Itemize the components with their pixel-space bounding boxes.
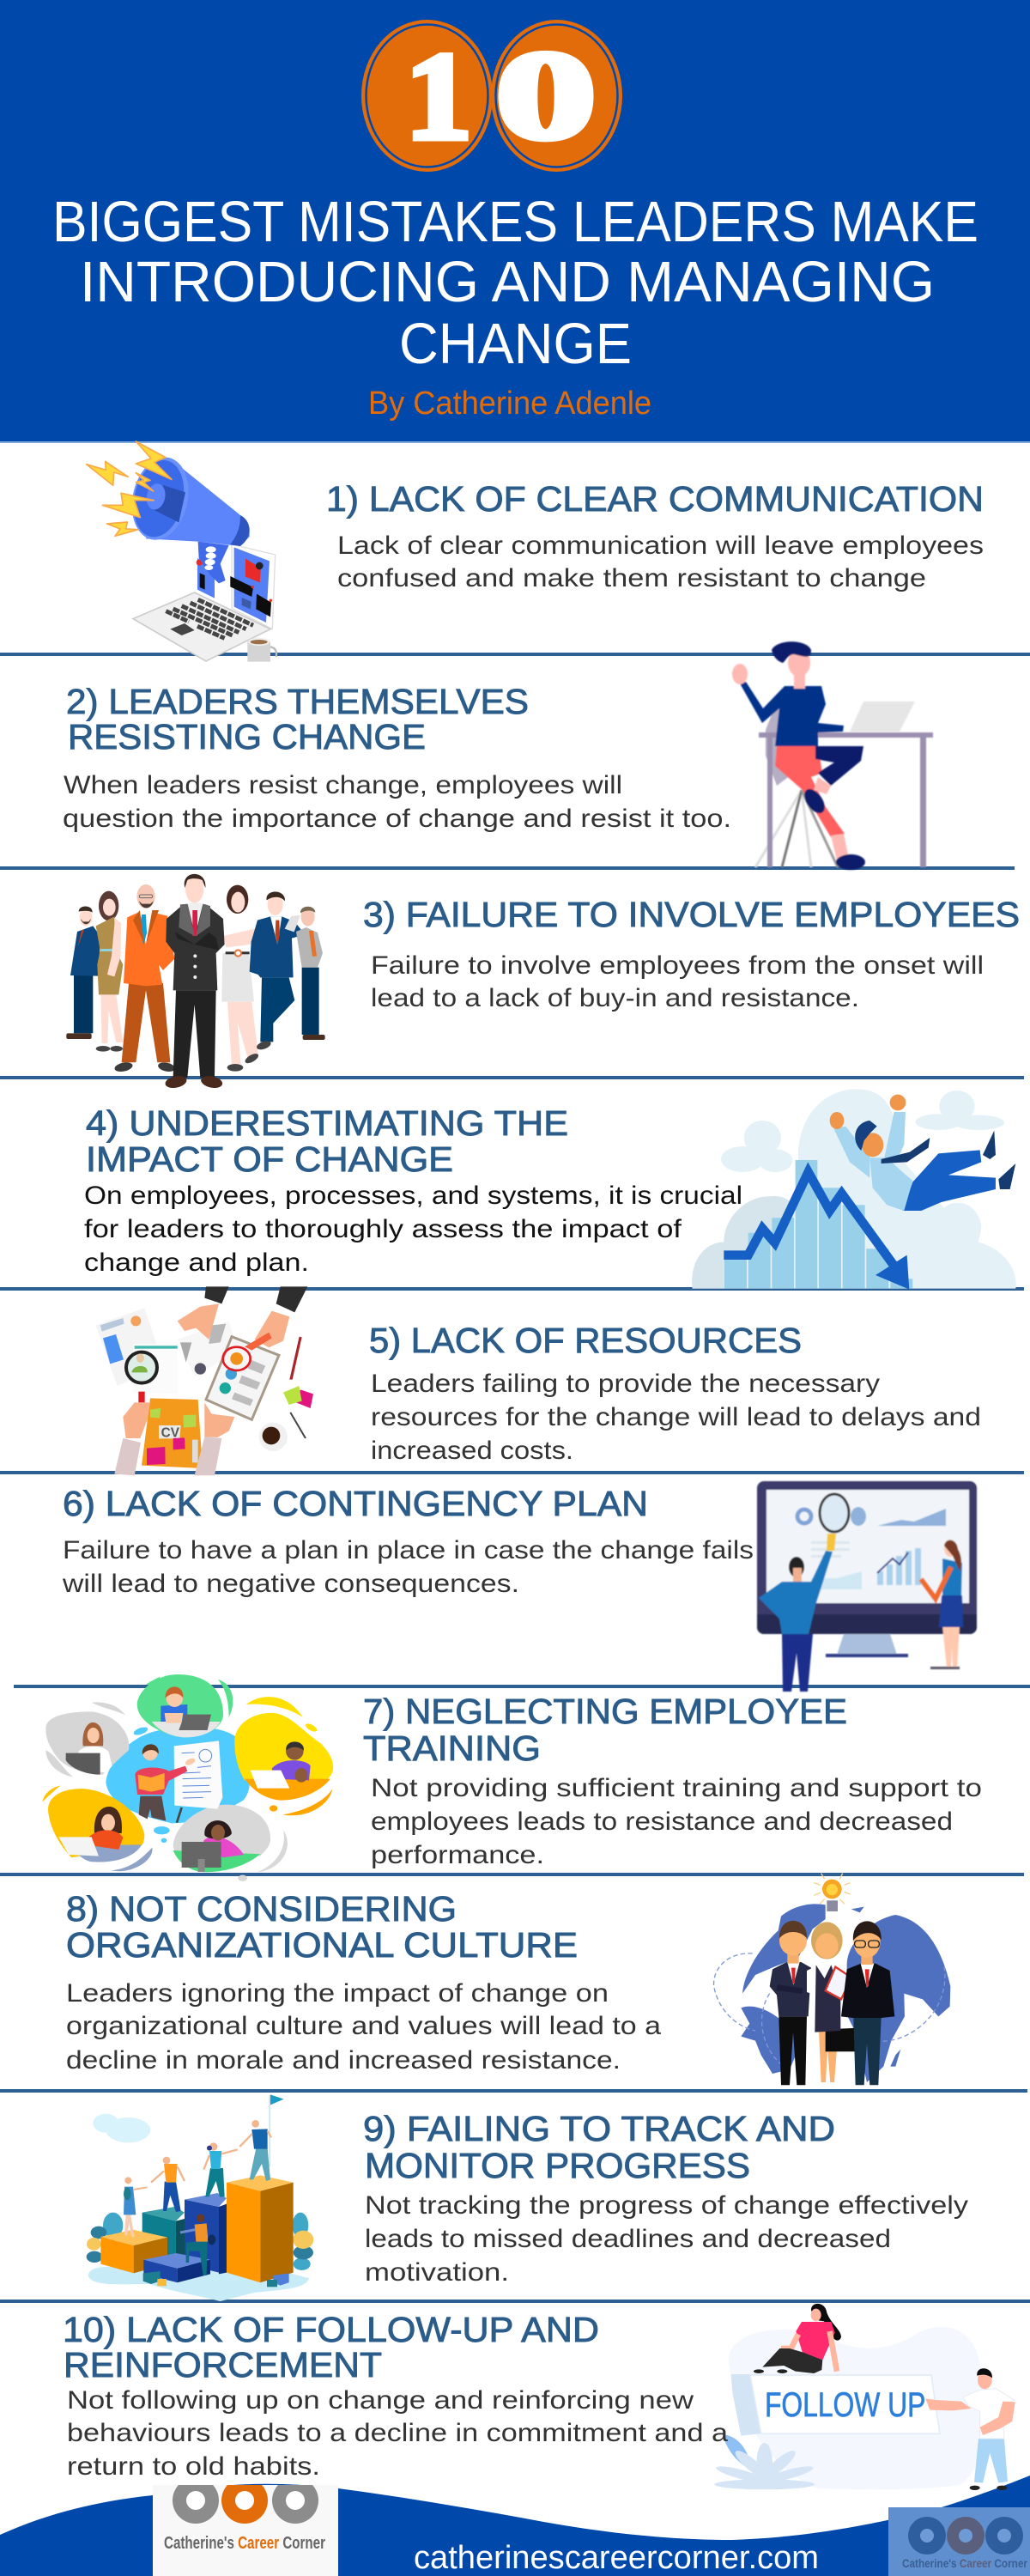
byline: By Catherine Adenle: [368, 386, 651, 422]
panel: mistake 3: [66, 874, 1020, 1090]
title: [52, 190, 978, 376]
left learner: [66, 1722, 112, 1775]
climber with flag: [239, 2120, 271, 2181]
heading 7: 7) NEGLECTING EMPLOYEE: [363, 1692, 847, 1731]
body text 9: [365, 2191, 968, 2287]
heading 8: ORGANIZATIONAL CULTURE: [66, 1925, 578, 1965]
body text 10: [67, 2386, 728, 2481]
icon: people climbing stepped blocks: [87, 2094, 313, 2301]
seated woman: [754, 2304, 841, 2373]
body text 9: Not tracking the progress of change effectively: [365, 2191, 968, 2220]
climbing woman: [203, 2142, 238, 2196]
body text 7: performance.: [371, 1841, 544, 1869]
heading 2: 2) LEADERS THEMSELVES: [66, 682, 529, 721]
body text 7: Not providing sufficient training and support to: [371, 1774, 982, 1802]
body text 6: [62, 1536, 754, 1598]
heading 7: TRAINING: [363, 1728, 541, 1768]
body text 5: increased costs.: [371, 1437, 573, 1465]
panel: mistake 5: [96, 1286, 981, 1475]
heading 8: [66, 1889, 578, 1965]
number badge 10: 0: [496, 26, 596, 165]
plant: [714, 2434, 815, 2489]
icon: online learning blobs: [42, 1674, 333, 1881]
body text 8: Leaders ignoring the impact of change on: [66, 1979, 609, 2008]
heading 9: MONITOR PROGRESS: [365, 2146, 750, 2185]
heading 4: 4) UNDERESTIMATING THE: [86, 1103, 568, 1143]
panel: mistake 8: [66, 1874, 950, 2085]
heading 3: 3) FAILURE TO INVOLVE EMPLOYEES: [363, 895, 1020, 934]
icon: team of business people: [66, 874, 325, 1090]
panel: mistake 4: [84, 1089, 1016, 1290]
heading 4: IMPACT OF CHANGE: [86, 1139, 453, 1179]
title: CHANGE: [399, 312, 632, 376]
body text 10: Not following up on change and reinforcing new: [67, 2386, 694, 2415]
footer wave band: [0, 2476, 1030, 2576]
illustration: follow up sign: FOLLOW UP: [765, 2386, 925, 2424]
heading 7: [363, 1692, 847, 1768]
lower right learner: [182, 1820, 244, 1872]
man in orange suit: [114, 884, 176, 1073]
website address: catherinescareercorner.com: [414, 2540, 819, 2576]
body text 3: lead to a lack of buy-in and resistance.: [371, 984, 859, 1012]
body text 3: [371, 951, 984, 1012]
panel: mistake 7: [42, 1674, 982, 1881]
header banner: [0, 0, 1030, 443]
right businessman with glasses: [841, 1921, 894, 2085]
icon: woman at a desk: [732, 641, 933, 870]
body text 9: leads to missed deadlines and decreased: [365, 2225, 891, 2253]
body text 10: behaviours leads to a decline in commitment and a: [67, 2419, 728, 2447]
icon: megaphone and laptop: [87, 441, 276, 662]
central man in black suit: [164, 874, 225, 1090]
body text 2: [63, 771, 731, 833]
body text 2: question the importance of change and resist it too.: [63, 805, 731, 833]
lower left learner: [58, 1807, 123, 1856]
heading 6: 6) LACK OF CONTINGENCY PLAN: [63, 1484, 648, 1523]
body text 1: [337, 532, 984, 592]
body text 8: decline in morale and increased resistance.: [66, 2046, 621, 2075]
number badge 10: [361, 20, 622, 172]
body text 6: will lead to negative consequences.: [62, 1570, 519, 1598]
icon: CV review desk: [96, 1286, 313, 1475]
standing man pointing: [925, 2368, 1015, 2490]
flag: [269, 2094, 284, 2166]
body text 7: employees leads to resistance and decreased: [371, 1807, 953, 1836]
panel: mistake 6: [62, 1481, 977, 1692]
footer logo left: [153, 2477, 338, 2576]
left businessman: [770, 1921, 811, 2085]
heading 10: 10) LACK OF FOLLOW-UP AND: [63, 2310, 599, 2349]
body text 6: Failure to have a plan in place in case the change fails: [63, 1536, 754, 1564]
body text 4: change and plan.: [84, 1249, 309, 1277]
illustration: falling man and dropping chart: [692, 1089, 1016, 1290]
icon: CV review desk: CV: [161, 1426, 180, 1441]
body text 4: On employees, processes, and systems, it is crucial: [84, 1182, 742, 1210]
woman in white dress: [221, 885, 260, 1072]
body text 2: When leaders resist change, employees will: [64, 771, 622, 799]
illustration: follow up sign: [714, 2304, 1015, 2490]
heading 4: [86, 1103, 568, 1179]
icon: monitor with analysts: [757, 1481, 977, 1692]
heading 10: [63, 2310, 599, 2385]
body text 9: motivation.: [365, 2258, 509, 2287]
heading 1: 1) LACK OF CLEAR COMMUNICATION: [326, 479, 984, 519]
body text 8: organizational culture and values will lead to a: [66, 2012, 661, 2040]
heading 10: REINFORCEMENT: [64, 2345, 382, 2385]
number badge 10: 1: [405, 27, 472, 166]
body text 3: Failure to involve employees from the onset will: [371, 951, 984, 980]
footer logo right: [888, 2507, 1030, 2576]
heading 9: [363, 2109, 835, 2185]
body text 10: return to old habits.: [67, 2452, 320, 2481]
top learner: [161, 1686, 211, 1730]
woman with backpack: [124, 2177, 148, 2237]
panel: mistake 9: [87, 2094, 968, 2301]
body text 4: [84, 1182, 742, 1277]
heading 2: RESISTING CHANGE: [68, 717, 426, 756]
title: INTRODUCING AND MANAGING: [80, 250, 935, 314]
man in orange shirt: [151, 2157, 185, 2212]
body text 1: Lack of clear communication will leave employees: [337, 532, 984, 560]
businesswoman with clipboard: [807, 1922, 861, 2082]
footer logo left: Catherine's Career Corner: [164, 2534, 325, 2553]
body text 1: confused and make them resistant to change: [337, 564, 926, 592]
heading 2: [66, 682, 529, 756]
light bulb: [814, 1874, 851, 1911]
man in grey sweater: [296, 907, 325, 1040]
icon: business team and globe: [714, 1874, 950, 2085]
heading 8: 8) NOT CONSIDERING: [66, 1889, 457, 1929]
body text 4: for leaders to thoroughly assess the impact of: [84, 1215, 682, 1243]
teacher with flip chart: [135, 1741, 222, 1823]
woman in tan dress: [96, 891, 123, 1052]
right learner: [251, 1741, 311, 1789]
body text 5: Leaders failing to provide the necessary: [371, 1370, 880, 1398]
panel: mistake 10: [63, 2304, 1015, 2490]
body text 7: [371, 1774, 982, 1869]
body text 5: resources for the change will lead to delays and: [371, 1403, 981, 1431]
man climbing foreground: [180, 2215, 215, 2275]
panel: mistake 2: [63, 641, 933, 870]
body text 8: [66, 1979, 661, 2075]
man in blue suit: [250, 891, 305, 1051]
panel: mistake 1: [87, 441, 984, 662]
heading 5: 5) LACK OF RESOURCES: [369, 1321, 802, 1360]
body text 5: [371, 1370, 981, 1465]
far left man: [66, 907, 100, 1039]
heading 9: 9) FAILING TO TRACK AND: [363, 2109, 835, 2148]
